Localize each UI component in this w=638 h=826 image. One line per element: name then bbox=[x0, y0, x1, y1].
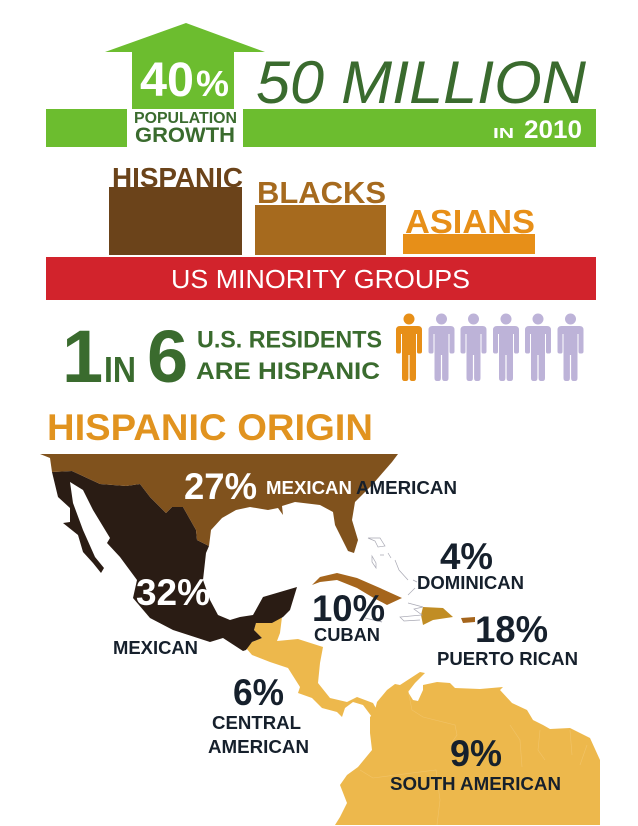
1 in 6 statistic bbox=[62, 315, 188, 398]
asians bar bbox=[403, 203, 535, 254]
population growth label: GROWTH bbox=[135, 124, 235, 147]
label: 32% mexican: MEXICAN bbox=[113, 637, 198, 658]
1 in 6 statistic: 6 bbox=[147, 315, 188, 398]
blacks bar bbox=[255, 175, 386, 255]
label: 6% central american: 6% bbox=[233, 672, 284, 713]
growth arrow bbox=[105, 23, 265, 109]
us minority groups banner bbox=[46, 257, 596, 300]
label: 32% mexican: 32% bbox=[136, 572, 210, 613]
label: 10% cuban: CUBAN bbox=[314, 624, 380, 645]
map: mexico bbox=[52, 471, 297, 651]
people pictogram bbox=[396, 314, 584, 381]
map: central america bbox=[246, 617, 378, 717]
label: 9% south american: 9% bbox=[450, 733, 502, 774]
map bbox=[40, 454, 600, 825]
map: south america bbox=[335, 672, 600, 825]
us minority groups banner: US MINORITY GROUPS bbox=[171, 264, 470, 294]
hispanic origin heading: HISPANIC ORIGIN bbox=[47, 407, 373, 448]
label: 6% central american: AMERICAN bbox=[208, 736, 309, 757]
label: 9% south american bbox=[390, 733, 561, 794]
1 in 6 statistic: IN bbox=[104, 349, 136, 390]
residents text: U.S. RESIDENTS bbox=[197, 326, 382, 354]
label: 4% dominican: 4% bbox=[440, 536, 493, 577]
label: 10% cuban: 10% bbox=[312, 588, 385, 629]
hispanic bar: HISPANIC bbox=[112, 162, 243, 193]
label: 27% mexican american: MEXICAN bbox=[266, 478, 352, 498]
label: 18% puerto rican: 18% bbox=[475, 609, 548, 650]
blacks bar: BLACKS bbox=[257, 175, 386, 210]
percent sign: % bbox=[196, 63, 229, 104]
label: 27% mexican american bbox=[184, 466, 457, 507]
residents text: ARE HISPANIC bbox=[196, 358, 380, 385]
1 in 6 statistic: 1 bbox=[62, 315, 103, 398]
label: 6% central american: CENTRAL bbox=[212, 712, 301, 733]
asians bar: ASIANS bbox=[405, 203, 535, 240]
label: 9% south american: SOUTH AMERICAN bbox=[390, 773, 561, 794]
population growth label bbox=[134, 110, 237, 147]
label: 4% dominican: DOMINICAN bbox=[417, 572, 524, 593]
label: 27% mexican american: 27% bbox=[184, 466, 257, 507]
label: 18% puerto rican: PUERTO RICAN bbox=[437, 648, 578, 669]
map: cuba bbox=[312, 573, 402, 605]
map: dominican republic bbox=[421, 607, 453, 625]
label: 6% central american bbox=[208, 672, 309, 757]
green growth bar bbox=[46, 109, 596, 147]
residents text bbox=[196, 326, 382, 385]
in 2010: 2010 bbox=[524, 116, 582, 144]
map: united states bbox=[40, 454, 398, 553]
label: 4% dominican bbox=[417, 536, 524, 593]
map: outlined islands bbox=[365, 538, 423, 622]
in 2010: IN bbox=[493, 125, 514, 142]
map: puerto rico bbox=[461, 617, 475, 623]
50 million heading: 50 MILLION bbox=[256, 49, 587, 116]
label: 18% puerto rican bbox=[437, 609, 578, 669]
40% growth figure: 40 bbox=[140, 54, 194, 107]
in 2010 bbox=[493, 116, 582, 144]
hispanic bar bbox=[109, 162, 243, 255]
label: 27% mexican american: AMERICAN bbox=[356, 478, 457, 498]
label: 32% mexican bbox=[113, 572, 210, 658]
population growth label: POPULATION bbox=[134, 110, 237, 127]
